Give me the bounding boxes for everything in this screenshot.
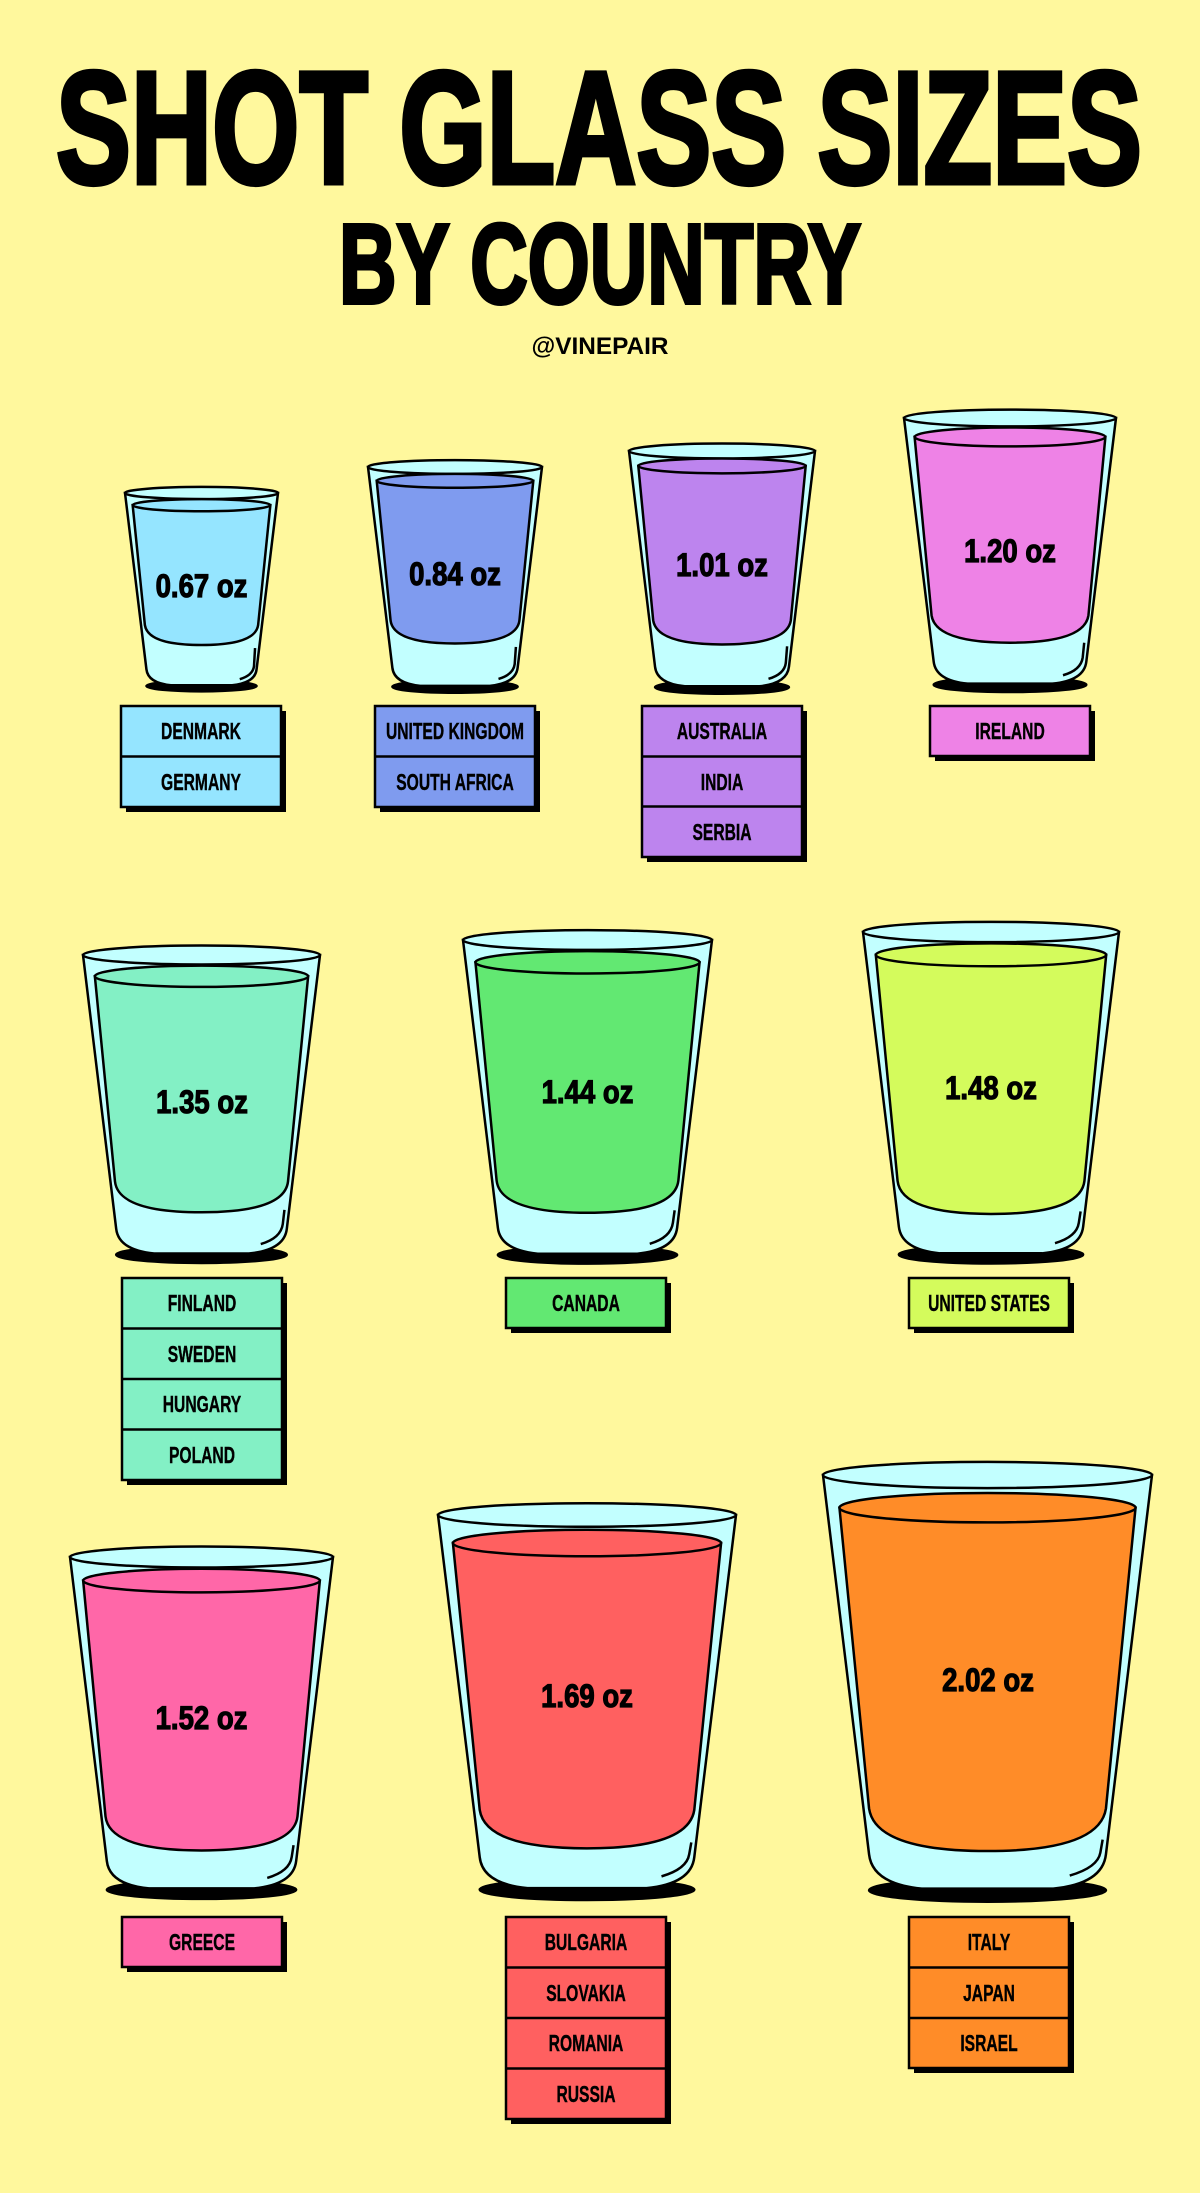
glass: 0.84 oz: 0.84 oz	[409, 557, 501, 593]
labels: 1.69 oz	[506, 1917, 671, 2124]
glass: 1.69 oz: 1.69 oz	[541, 1679, 633, 1715]
glass: 0.67 oz	[125, 487, 278, 691]
labels: 0.67 oz: GERMANY	[161, 770, 241, 796]
labels: 1.48 oz: UNITED STATES	[928, 1291, 1050, 1317]
glass: 1.35 oz	[83, 946, 320, 1263]
labels: 1.20 oz: IRELAND	[975, 719, 1045, 745]
glass: 1.20 oz: 1.20 oz	[964, 534, 1056, 570]
labels: 1.69 oz: SLOVAKIA	[546, 1981, 626, 2007]
glass: 1.01 oz: 1.01 oz	[676, 548, 768, 584]
labels: 1.69 oz: BULGARIA	[545, 1930, 627, 1956]
labels: 0.84 oz: SOUTH AFRICA	[396, 770, 514, 796]
labels: 1.01 oz: AUSTRALIA	[677, 719, 767, 745]
labels: 2.02 oz: JAPAN	[963, 1981, 1015, 2007]
glass: 1.69 oz	[438, 1503, 736, 1900]
labels: 1.35 oz: POLAND	[169, 1443, 235, 1469]
labels: 1.01 oz: INDIA	[701, 770, 743, 796]
labels: 1.20 oz	[930, 706, 1095, 761]
glass: 1.48 oz: 1.48 oz	[945, 1071, 1037, 1107]
labels: 1.35 oz: SWEDEN	[168, 1342, 236, 1368]
labels: 0.84 oz: UNITED KINGDOM	[386, 719, 524, 745]
glass: 1.52 oz: 1.52 oz	[156, 1701, 247, 1737]
glass: 0.84 oz	[368, 460, 542, 693]
labels: 0.67 oz: DENMARK	[161, 719, 242, 745]
glass: 1.52 oz	[70, 1547, 333, 1899]
labels: 1.44 oz	[506, 1278, 671, 1333]
credit: @VINEPAIR	[532, 333, 668, 360]
labels: 1.69 oz: RUSSIA	[556, 2082, 616, 2108]
labels: 1.35 oz: HUNGARY	[163, 1392, 241, 1418]
glass: 2.02 oz: 2.02 oz	[942, 1663, 1034, 1699]
glass: 1.20 oz	[904, 410, 1116, 692]
labels: 2.02 oz	[909, 1917, 1074, 2073]
labels: 1.52 oz: GREECE	[169, 1930, 235, 1956]
glass: 1.44 oz: 1.44 oz	[542, 1075, 633, 1111]
glass: 1.35 oz: 1.35 oz	[156, 1085, 248, 1121]
glass: 1.01 oz	[629, 444, 815, 694]
labels: 2.02 oz: ITALY	[968, 1930, 1010, 1956]
labels: 1.01 oz	[642, 706, 807, 862]
labels: 0.67 oz	[121, 706, 286, 812]
glass: 1.48 oz	[863, 922, 1119, 1263]
labels: 2.02 oz: ISRAEL	[960, 2031, 1018, 2057]
glass: 0.67 oz: 0.67 oz	[156, 569, 247, 605]
labels: 1.44 oz: CANADA	[552, 1291, 620, 1317]
labels: 1.52 oz	[122, 1917, 287, 1972]
labels: 1.35 oz	[122, 1278, 287, 1485]
labels: 1.69 oz: ROMANIA	[549, 2031, 623, 2057]
labels: 0.84 oz	[375, 706, 540, 812]
subtitle: BY COUNTRY	[339, 201, 861, 327]
labels: 1.35 oz: FINLAND	[168, 1291, 236, 1317]
glass: 1.44 oz	[463, 930, 712, 1264]
labels: 1.01 oz: SERBIA	[692, 820, 752, 846]
labels: 1.48 oz	[909, 1278, 1074, 1333]
glass: 2.02 oz	[823, 1462, 1152, 1902]
